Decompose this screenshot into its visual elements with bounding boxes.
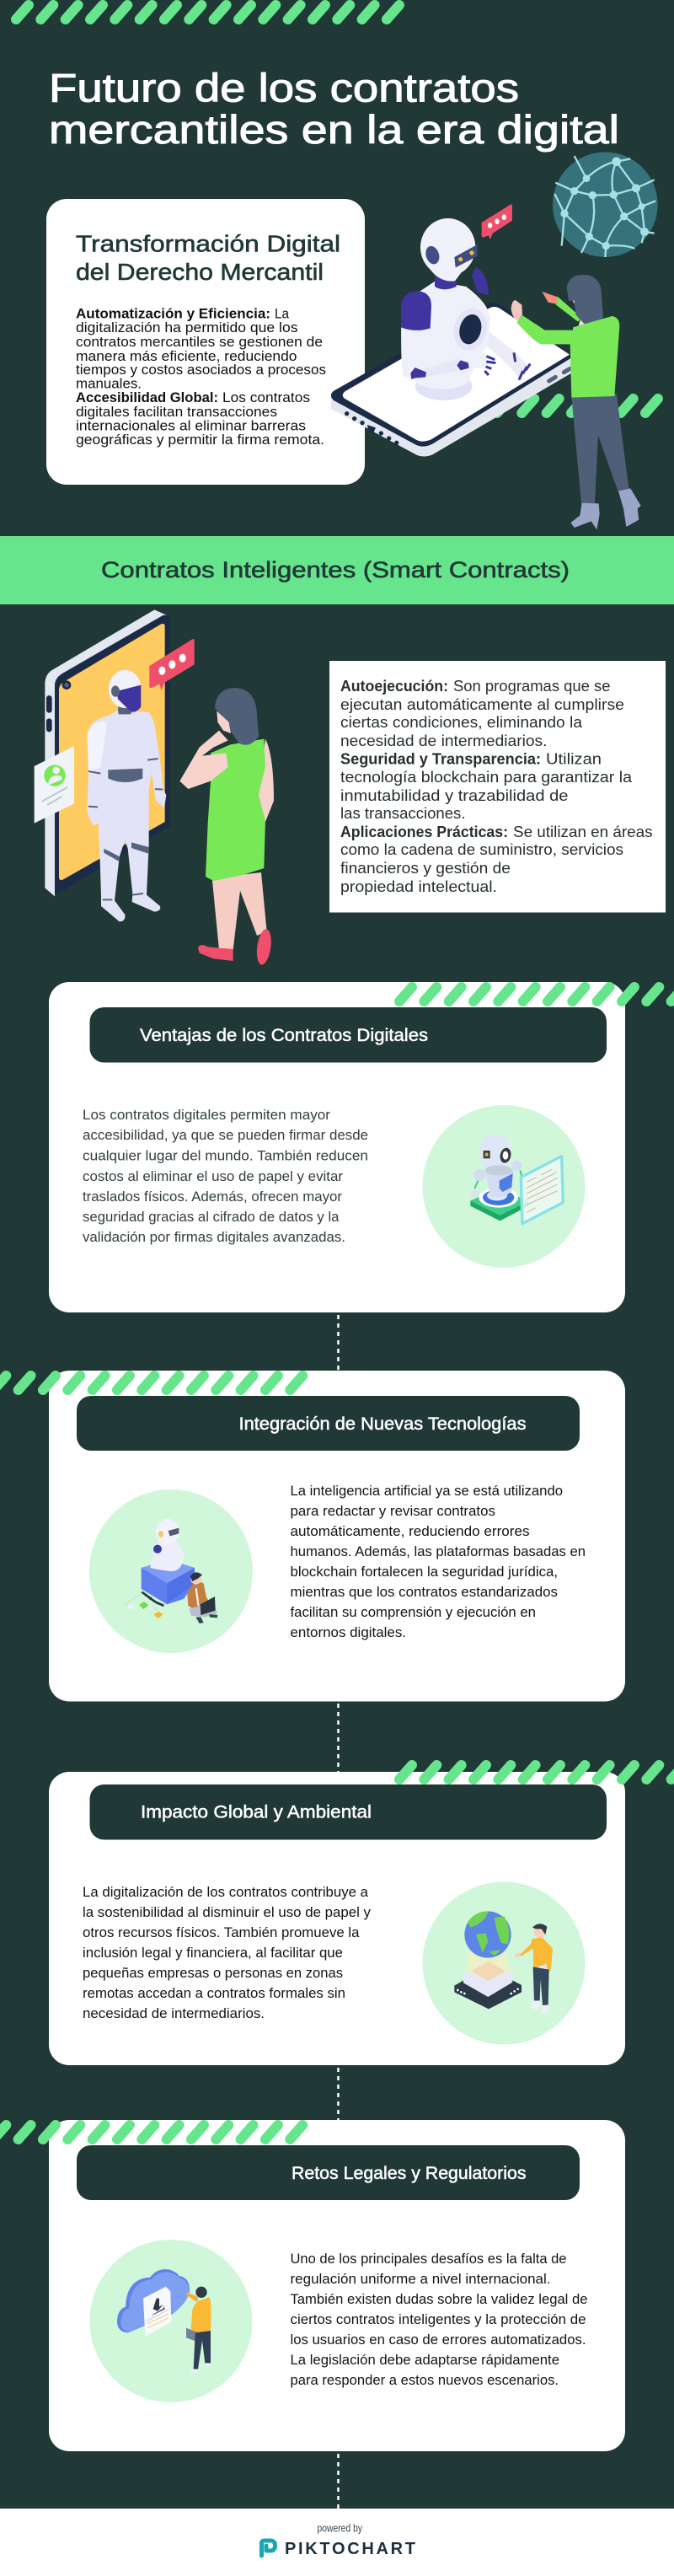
body text: inclusión legal y financiera, al facilitar que <box>83 1945 343 1961</box>
section band: smart contracts <box>0 536 674 604</box>
heading bar: Retos Legales y Regulatorios <box>292 2164 526 2183</box>
logo: Piktochart: PIKTOCHART <box>285 2540 415 2558</box>
icon: network globe <box>553 152 658 257</box>
body text: ciertos contratos inteligentes y la protección de <box>290 2311 586 2327</box>
body text: blockchain fortalecen la seguridad jurídica, <box>290 1564 558 1580</box>
panel text: La <box>275 307 290 322</box>
panel: smart contract features: financieros y gestión de <box>340 860 511 877</box>
body text: La digitalización de los contratos contribuye a <box>83 1884 369 1900</box>
panel text: digitalización ha permitido que los <box>76 320 298 335</box>
body text: traslados físicos. Además, ofrecen mayor <box>83 1189 342 1205</box>
panel: smart contract features: Aplicaciones Prácticas: <box>340 824 508 840</box>
panel: smart contract features: inmutabilidad y trazabilidad de <box>340 787 568 804</box>
illustration: robot in tablet with woman <box>35 609 274 966</box>
panel text: Automatización y Eficiencia: <box>76 307 270 322</box>
heading bar: Ventajas de los Contratos Digitales <box>140 1026 428 1045</box>
body text: para redactar y revisar contratos <box>290 1503 495 1519</box>
body text: validación por firmas digitales avanzadas. <box>83 1229 345 1245</box>
phone <box>331 303 573 457</box>
heading bar <box>89 1784 607 1839</box>
heading bar <box>77 2145 580 2200</box>
panel: new technologies <box>0 1371 625 1701</box>
body text: entornos digitales. <box>290 1624 406 1640</box>
panel heading: del Derecho Mercantil <box>76 259 324 285</box>
body text: La legislación debe adaptarse rápidamente <box>290 2352 559 2368</box>
panel: digital transformation <box>46 199 365 485</box>
panel text: manera más eficiente, reduciendo <box>76 349 297 364</box>
body text: humanos. Además, las plataformas basadas en <box>290 1543 586 1559</box>
body text: regulación uniforme a nivel internacional. <box>290 2271 551 2287</box>
panel: smart contract features: propiedad intelectual. <box>340 878 497 895</box>
stripes <box>399 1765 674 1779</box>
powered by label: powered by <box>317 2522 363 2534</box>
panel: smart contract features: Seguridad y Transparencia: <box>340 750 541 767</box>
body text: También existen dudas sobre la validez legal de <box>290 2291 588 2307</box>
circle icon: robot and document <box>423 1105 585 1268</box>
body text: los usuarios en caso de errores automatizados. <box>290 2332 586 2348</box>
heading bar <box>89 1007 607 1062</box>
hero stripes <box>275 399 658 413</box>
panel: smart contract features: Se utilizan en áreas <box>513 824 652 840</box>
title: mercantiles en la era digital <box>49 107 619 152</box>
connector dashes <box>337 1315 340 2509</box>
body text: Los contratos digitales permiten mayor <box>83 1107 330 1123</box>
panel text: Accesibilidad Global: <box>76 390 218 405</box>
body text <box>83 1107 368 1245</box>
title: Futuro de los contratos <box>49 66 519 110</box>
body text <box>290 2251 588 2388</box>
heading bar <box>77 1396 580 1451</box>
heading bar: Impacto Global y Ambiental <box>141 1802 372 1822</box>
body text: seguridad gracias al cifrado de datos y la <box>83 1209 340 1225</box>
panel text: tiempos y costos asociados a procesos <box>76 362 326 378</box>
panel: smart contract features: Utilizan <box>546 750 602 767</box>
body text: otros recursos físicos. También promueve la <box>83 1924 360 1940</box>
top stripes <box>16 5 399 19</box>
panel: advantages <box>49 982 674 1312</box>
panel text: internacionales al eliminar barreras <box>76 418 306 433</box>
panel: smart contract features: ejecutan automáticamente al cumplirse <box>340 696 624 713</box>
tablet <box>45 609 170 896</box>
panel heading: Transformación Digital <box>76 231 340 256</box>
body text: mientras que los contratos estandarizados <box>290 1584 558 1600</box>
body text: remotas accedan a contratos formales sin <box>83 1985 345 2001</box>
speech bubble <box>149 639 195 690</box>
body text <box>290 1483 586 1640</box>
panel: global and environmental impact <box>49 1765 674 2065</box>
body text <box>83 1884 371 2021</box>
panel text <box>76 307 326 448</box>
body text: necesidad de intermediarios. <box>83 2005 265 2021</box>
body text: cualquier lugar del mundo. También reducen <box>83 1148 368 1163</box>
panel: smart contract features: las transacciones. <box>340 805 465 822</box>
stripes <box>0 2125 302 2139</box>
body text: La inteligencia artificial ya se está utilizando <box>290 1483 563 1499</box>
panel: smart contract features: tecnología blockchain para garantizar la <box>340 769 633 786</box>
circle icon: robot on chip with person <box>89 1489 253 1653</box>
circle icon: cloud document with person <box>89 2240 253 2402</box>
panel: smart contract features: como la cadena de suministro, servicios <box>340 841 623 858</box>
panel: smart contract features: Autoejecución: <box>340 678 448 695</box>
panel text: Los contratos <box>222 390 310 405</box>
body text: facilitan su comprensión y ejecución en <box>290 1604 536 1620</box>
footer <box>0 2509 674 2576</box>
heading bar: Integración de Nuevas Tecnologías <box>239 1414 526 1434</box>
body text: accesibilidad, ya que se pueden firmar desde <box>83 1127 368 1143</box>
woman <box>511 275 641 529</box>
body text: automáticamente, reduciendo errores <box>290 1523 529 1539</box>
woman <box>179 688 274 966</box>
panel: smart contract features: Son programas que se <box>453 678 610 695</box>
profile card <box>35 746 74 824</box>
panel text: manuales. <box>76 376 142 391</box>
speech bubble <box>482 205 512 239</box>
stripes <box>0 1376 302 1390</box>
body text: para responder a estos nuevos escenarios. <box>290 2372 559 2388</box>
robot figure <box>87 670 166 921</box>
panel: smart contract features: necesidad de intermediarios. <box>340 733 548 749</box>
robot <box>401 218 530 400</box>
panel: smart contract features: ciertas condiciones, eliminando la <box>340 714 583 731</box>
panel: smart contract features <box>329 661 666 912</box>
band heading: Contratos Inteligentes (Smart Contracts) <box>101 557 570 582</box>
illustration: robot on phone with woman <box>331 205 641 529</box>
stripes <box>399 987 674 1001</box>
panel text: digitales facilitan transacciones <box>76 405 277 420</box>
body text: la sostenibilidad al disminuir el uso de papel y <box>83 1904 371 1920</box>
panel: legal challenges <box>0 2120 625 2451</box>
circle icon: globe hologram with person <box>423 1881 585 2045</box>
panel text: geográficas y permitir la firma remota. <box>76 432 324 448</box>
panel text: contratos mercantiles se gestionen de <box>76 335 323 350</box>
title <box>49 66 619 152</box>
body text: costos al eliminar el uso de papel y evitar <box>83 1168 343 1184</box>
panel heading <box>76 231 340 285</box>
body text: pequeñas empresas o personas en zonas <box>83 1965 343 1981</box>
body text: Uno de los principales desafíos es la falta de <box>290 2251 566 2267</box>
